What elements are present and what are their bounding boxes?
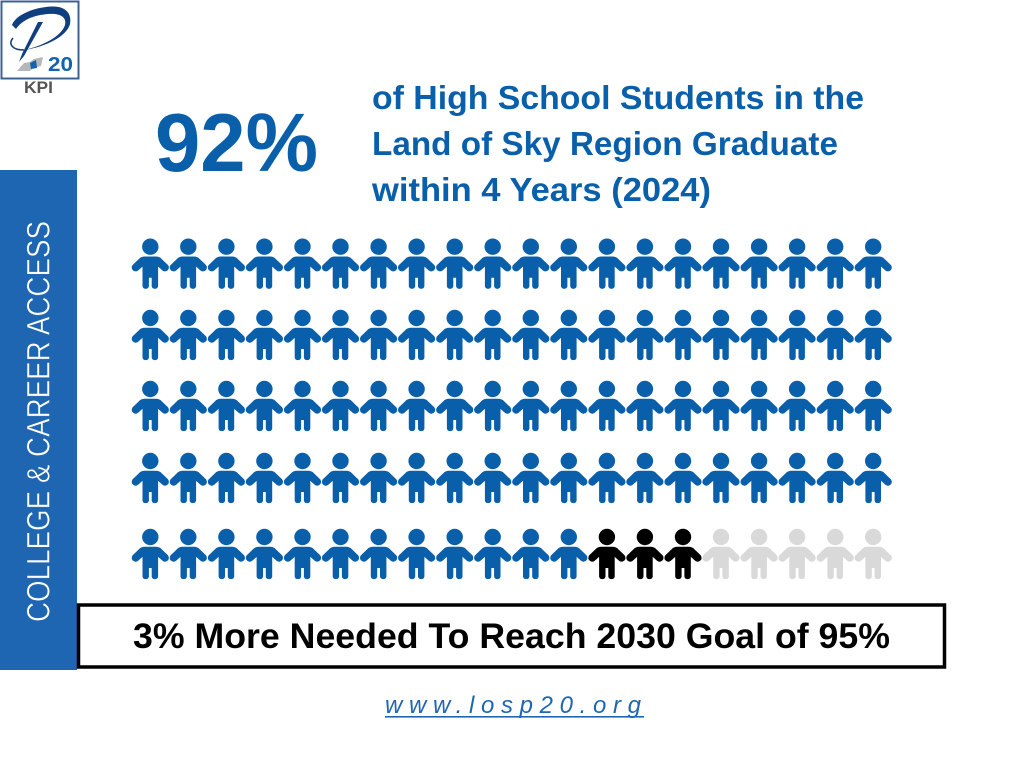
- logo: P20 KPI: KPI: [24, 78, 53, 97]
- side banner: College & Career Access: COLLEGE & CAREER ACCESS: [20, 221, 56, 622]
- pictogram: row 4: [132, 453, 891, 503]
- side banner: College & Career Access: [0, 170, 77, 670]
- pictogram: row 1: [132, 239, 891, 288]
- headline: Land of Sky Region Graduate: [372, 125, 838, 162]
- gray figures: remainder: [703, 529, 891, 579]
- website link: www.losp20.org: [385, 692, 642, 719]
- pictogram: row 3: [132, 381, 891, 431]
- logo: P20 KPI: 20: [48, 54, 73, 76]
- headline: within 4 Years (2024): [371, 171, 711, 208]
- goal callout box: 3% More Needed To Reach 2030 Goal of 95%: [133, 617, 890, 656]
- black figures: 3% more needed: [589, 529, 701, 579]
- big statistic: 92%: 92%: [155, 96, 318, 189]
- pictogram: row 5: [132, 529, 891, 579]
- headline: of High School Students in the: [372, 79, 864, 116]
- logo: P20 KPI: [2, 2, 78, 97]
- pictogram: row 2: [132, 310, 891, 360]
- blue figures: achieved: [132, 529, 587, 579]
- headline: [371, 79, 864, 208]
- goal callout box: [78, 605, 944, 667]
